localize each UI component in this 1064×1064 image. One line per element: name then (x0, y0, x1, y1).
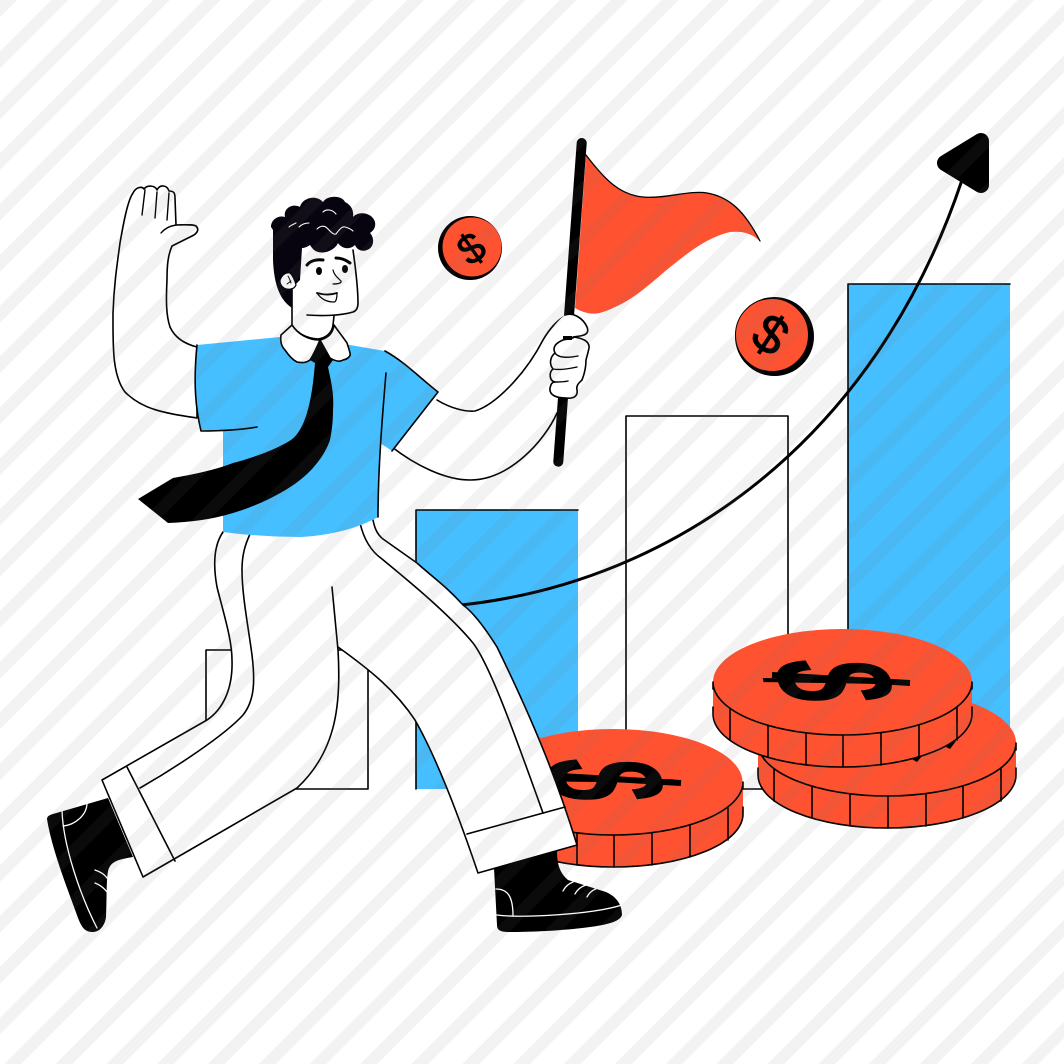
bar 1: white outlined (206, 650, 368, 789)
dollar sign on top coin: $ (734, 658, 933, 704)
ear (280, 273, 296, 289)
flag (575, 155, 760, 314)
dollar sign on front coin: $ (505, 757, 704, 803)
raised arm and hand (113, 186, 198, 418)
floating coin: small (438, 216, 502, 280)
growth arrow line (461, 180, 962, 605)
floating coin: large (735, 297, 814, 376)
front shoe (494, 850, 622, 932)
face features (307, 258, 350, 302)
bar 4: blue (848, 284, 1010, 744)
floating coin: small: $ (448, 222, 494, 274)
floating coin: large: $ (742, 301, 799, 368)
neck and face (292, 240, 358, 339)
coin stack: bottom right coin (758, 690, 1016, 828)
bar 3: white outlined (626, 416, 788, 789)
flag pole (558, 143, 582, 462)
back shoe (47, 798, 133, 932)
tie (138, 340, 333, 523)
bar 2: blue (416, 510, 578, 789)
forward arm (392, 316, 585, 480)
collar (281, 325, 350, 363)
trousers (102, 520, 577, 877)
shirt (195, 337, 438, 537)
coin: front coin with dollar sign (484, 729, 743, 867)
person (47, 143, 622, 932)
hand gripping pole (543, 314, 589, 398)
hair highlights (289, 210, 353, 234)
coin stack: top coin with dollar sign (713, 629, 972, 767)
chart: bar chart with rising arrow (206, 141, 1010, 789)
hair (271, 197, 375, 308)
arrow head (945, 141, 981, 185)
